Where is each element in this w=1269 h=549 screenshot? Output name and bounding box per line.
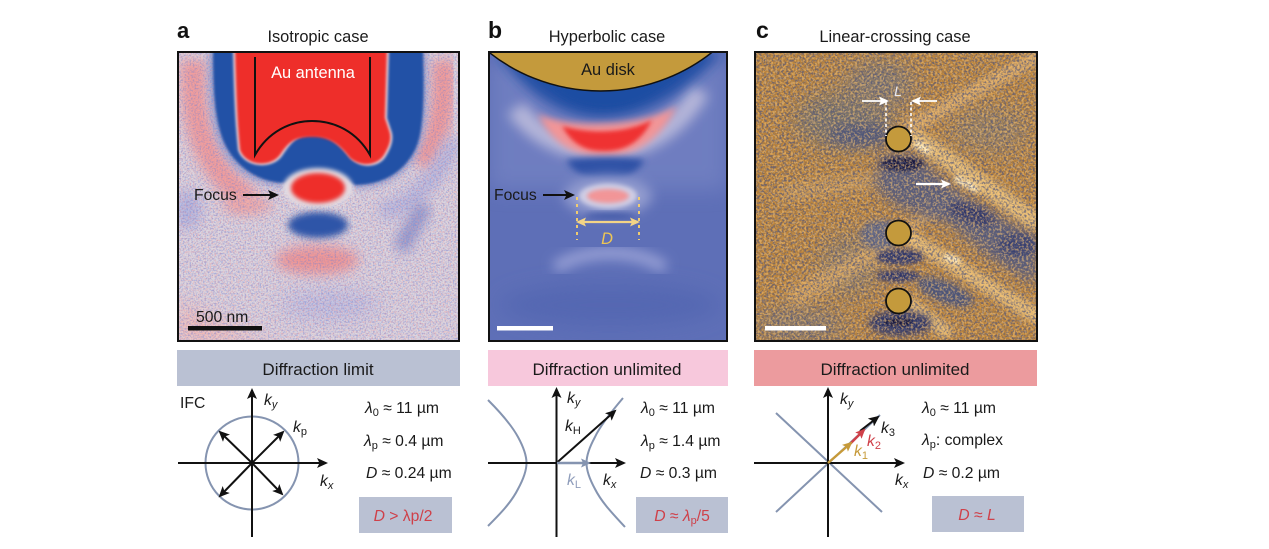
parameters b: p bbox=[649, 440, 655, 452]
banner: diffraction unlimited c bbox=[754, 350, 1037, 386]
parameters a bbox=[363, 400, 452, 482]
panel b frame bbox=[489, 52, 727, 341]
scale bar c bbox=[765, 326, 826, 330]
focus arrow a bbox=[243, 194, 277, 196]
IFC diagram a: y bbox=[271, 399, 279, 411]
callout a bbox=[359, 497, 452, 533]
parameters a: p bbox=[372, 440, 378, 452]
callout a: D > λp/2 bbox=[374, 508, 432, 525]
scale bar a: 500 nm bbox=[196, 309, 248, 326]
IFC diagram c: y bbox=[847, 398, 855, 410]
panel: hyperbolic near-field map bbox=[490, 53, 726, 340]
IFC diagram a: k bbox=[293, 419, 301, 436]
parameters c: 0 bbox=[930, 407, 936, 419]
focus arrow b bbox=[543, 194, 573, 196]
antenna outline bbox=[255, 57, 370, 155]
parameters b: λ bbox=[640, 400, 649, 417]
banner: diffraction unlimited b bbox=[488, 350, 728, 386]
parameters b: D ≈ 0.3 µm bbox=[640, 465, 717, 482]
antenna label: Au antenna bbox=[271, 64, 356, 82]
panel b title: Hyperbolic case bbox=[549, 28, 665, 46]
propagation arrow bbox=[916, 183, 949, 185]
IFC diagram c bbox=[754, 389, 909, 537]
panel: linear-crossing near-field map bbox=[755, 52, 1040, 343]
IFC diagram b: k bbox=[567, 472, 575, 489]
banner: diffraction limit bbox=[177, 350, 460, 386]
L marker: L bbox=[894, 83, 902, 99]
IFC diagram a: IFC bbox=[180, 395, 205, 412]
panel a title: Isotropic case bbox=[267, 28, 369, 46]
panel a frame bbox=[178, 52, 459, 341]
parameters b: λ bbox=[640, 433, 649, 450]
focus label a: Focus bbox=[194, 187, 237, 204]
callout b: p bbox=[691, 515, 697, 527]
panel c frame bbox=[755, 52, 1037, 341]
callout c bbox=[932, 496, 1024, 532]
banner: diffraction unlimited b: Diffraction unlimited bbox=[533, 360, 681, 379]
parameters c: : complex bbox=[936, 432, 1003, 449]
D marker: D bbox=[601, 230, 613, 248]
D marker bbox=[577, 197, 639, 248]
parameters a: 0 bbox=[373, 407, 379, 419]
IFC diagram b: y bbox=[574, 397, 582, 409]
banner: diffraction limit: Diffraction limit bbox=[262, 360, 374, 379]
IFC diagram b: x bbox=[610, 479, 617, 491]
IFC diagram c: x bbox=[902, 479, 909, 491]
panel: isotropic near-field map bbox=[174, 50, 459, 345]
parameters c: D ≈ 0.2 µm bbox=[923, 465, 1000, 482]
parameters c: p bbox=[930, 439, 936, 451]
IFC diagram a bbox=[178, 390, 334, 537]
parameters c: λ bbox=[921, 432, 930, 449]
L marker bbox=[862, 83, 937, 136]
IFC diagram c: 3 bbox=[889, 427, 895, 439]
IFC diagram b: L bbox=[575, 479, 581, 491]
IFC diagram b bbox=[488, 389, 625, 537]
banner: diffraction unlimited c: Diffraction unlimited bbox=[821, 360, 969, 379]
parameters b: ≈ 1.4 µm bbox=[655, 433, 720, 450]
IFC diagram a: k bbox=[264, 392, 272, 409]
parameters a: λ bbox=[363, 433, 372, 450]
IFC diagram b: k bbox=[567, 390, 575, 407]
IFC diagram c: 2 bbox=[875, 440, 881, 452]
panel a label: a bbox=[177, 18, 190, 43]
callout b: D ≈ λ bbox=[654, 508, 691, 525]
panel c title: Linear-crossing case bbox=[819, 28, 971, 46]
callout b: /5 bbox=[697, 508, 710, 525]
IFC diagram c: 1 bbox=[862, 450, 868, 462]
parameters b: 0 bbox=[649, 407, 655, 419]
disk label: Au disk bbox=[581, 61, 636, 79]
nanodisks bbox=[886, 126, 911, 314]
IFC diagram c: k bbox=[840, 391, 848, 408]
parameters a: ≈ 0.4 µm bbox=[378, 433, 443, 450]
IFC diagram c: k bbox=[867, 433, 875, 450]
panel b label: b bbox=[488, 17, 502, 43]
IFC diagram b: k bbox=[603, 472, 611, 489]
IFC diagram c: k bbox=[854, 443, 862, 460]
focus label b: Focus bbox=[494, 187, 537, 204]
scale bar b bbox=[497, 326, 553, 330]
callout c: D ≈ L bbox=[958, 507, 996, 524]
IFC diagram a: p bbox=[301, 426, 307, 438]
parameters c: ≈ 11 µm bbox=[936, 400, 996, 417]
scale bar a bbox=[188, 309, 262, 330]
IFC diagram c: k bbox=[881, 420, 889, 437]
parameters b: ≈ 11 µm bbox=[655, 400, 715, 417]
parameters c: λ bbox=[921, 400, 930, 417]
IFC diagram b: H bbox=[573, 425, 581, 437]
parameters a: D ≈ 0.24 µm bbox=[366, 465, 452, 482]
parameters a: λ bbox=[364, 400, 373, 417]
IFC diagram a: x bbox=[327, 480, 334, 492]
IFC diagram b: k bbox=[565, 418, 573, 435]
IFC diagram c: k bbox=[895, 472, 903, 489]
panel c label: c bbox=[756, 17, 769, 43]
callout b bbox=[636, 497, 728, 533]
IFC diagram a: k bbox=[320, 473, 328, 490]
parameters b bbox=[640, 400, 720, 482]
parameters a: ≈ 11 µm bbox=[379, 400, 439, 417]
parameters c bbox=[921, 400, 1003, 482]
